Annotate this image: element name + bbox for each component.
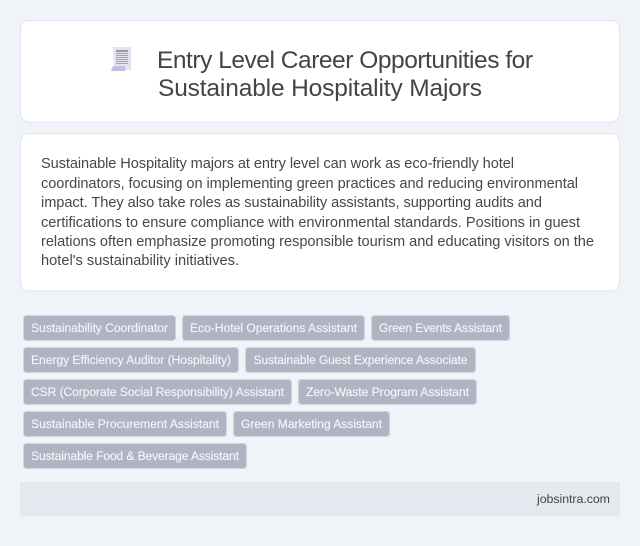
tag: CSR (Corporate Social Responsibility) Assistant: CSR (Corporate Social Responsibility) Assistant bbox=[31, 385, 285, 399]
tag: Sustainable Food & Beverage Assistant bbox=[24, 444, 246, 468]
tag: Eco-Hotel Operations Assistant: Eco-Hotel Operations Assistant bbox=[190, 321, 358, 335]
tag: Sustainable Food & Beverage Assistant: Sustainable Food & Beverage Assistant bbox=[31, 449, 240, 463]
tag: Sustainable Procurement Assistant bbox=[24, 412, 226, 436]
text block: description: certifications to ensure compliance with environmental standards. Positions in guest bbox=[41, 215, 580, 231]
text block: description: impact. They also take roles as sustainability assistants, supporting audits and bbox=[41, 195, 542, 211]
tag: Sustainability Coordinator bbox=[24, 316, 176, 340]
footer text: source: jobsintra.com bbox=[536, 492, 610, 506]
tag: Energy Efficiency Auditor (Hospitality) bbox=[24, 348, 238, 372]
tag: Green Events Assistant: Green Events Assistant bbox=[379, 321, 503, 335]
tag: Green Events Assistant bbox=[372, 316, 510, 340]
tag: Green Marketing Assistant: Green Marketing Assistant bbox=[241, 417, 383, 431]
tag: Sustainable Guest Experience Associate: Sustainable Guest Experience Associate bbox=[254, 353, 468, 367]
footer bar bbox=[20, 482, 620, 516]
tag: Energy Efficiency Auditor (Hospitality): Energy Efficiency Auditor (Hospitality) bbox=[31, 353, 231, 367]
tag: Zero-Waste Program Assistant: Zero-Waste Program Assistant bbox=[306, 385, 470, 399]
text block: description bbox=[41, 156, 594, 269]
tag: Sustainability Coordinator: Sustainability Coordinator bbox=[31, 321, 168, 335]
text block: description: coordinators, focusing on implementing green practices and reducing environmental bbox=[41, 176, 578, 192]
text block: description: hotel's sustainability initiatives. bbox=[41, 253, 239, 269]
tag: Sustainable Procurement Assistant: Sustainable Procurement Assistant bbox=[31, 417, 220, 431]
heading: title: Entry Level Career Opportunities for bbox=[157, 47, 533, 74]
tag: Zero-Waste Program Assistant bbox=[298, 380, 476, 404]
tag: Sustainable Guest Experience Associate bbox=[246, 348, 476, 372]
heading: title: Sustainable Hospitality Majors bbox=[158, 75, 482, 102]
tag: Green Marketing Assistant bbox=[234, 412, 390, 436]
text block: description: relations often emphasize promoting responsible tourism and educating visitors on the bbox=[41, 234, 594, 250]
icon: paper scroll bbox=[111, 47, 131, 71]
tag: CSR (Corporate Social Responsibility) Assistant bbox=[24, 380, 292, 404]
text block: description: Sustainable Hospitality majors at entry level can work as eco-friendly hotel bbox=[41, 156, 514, 172]
tag: Eco-Hotel Operations Assistant bbox=[182, 316, 364, 340]
panel: description card bbox=[20, 134, 620, 291]
heading: title bbox=[157, 47, 533, 102]
panel: title card bbox=[20, 20, 620, 122]
tag list: job titles bbox=[24, 316, 510, 468]
